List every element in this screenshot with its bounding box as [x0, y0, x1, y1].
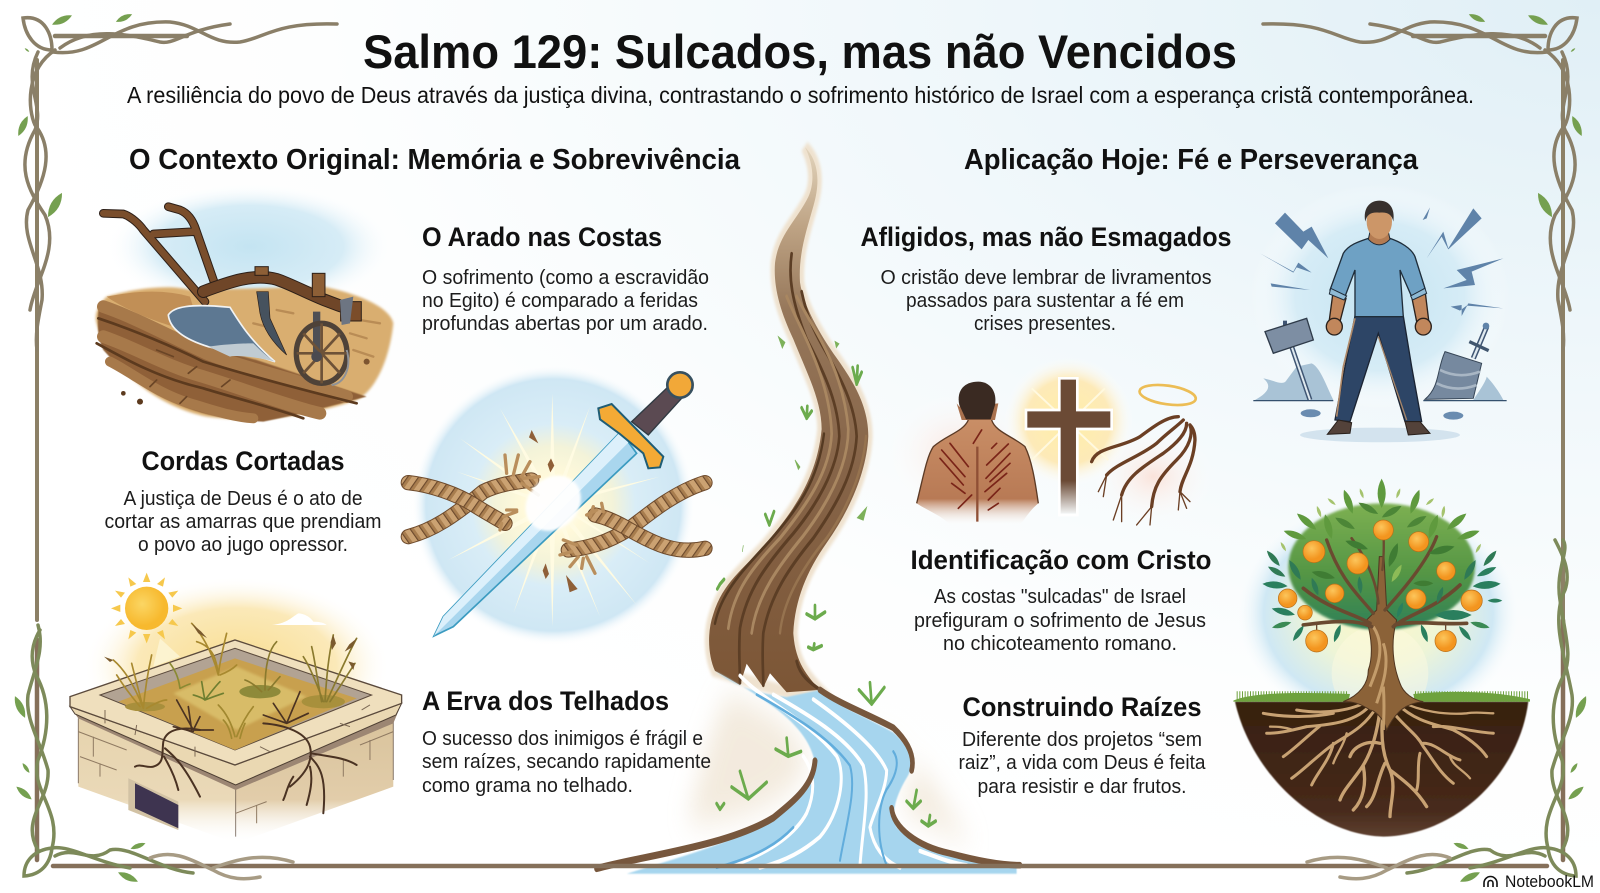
river	[627, 671, 1017, 874]
icon: scarred back, cross and whip	[883, 357, 1217, 527]
heading: left column: O Contexto Original: Memória e Sobrevivência	[129, 144, 741, 176]
text block: Cordas Cortadas: o povo ao jugo opressor.	[138, 533, 348, 556]
text block: A Erva dos Telhados: A Erva dos Telhados	[422, 686, 669, 716]
river banks	[820, 690, 1020, 865]
watermark: NotebookLM: NotebookLM	[1505, 873, 1594, 891]
icon: plow in the field	[96, 183, 393, 422]
text block: A Erva dos Telhados: sem raízes, secando rapidamente	[422, 750, 711, 773]
text block: O Arado nas Costas	[422, 222, 709, 335]
text block: Afligidos, mas não Esmagados	[860, 222, 1232, 335]
icon: sword cutting ropes	[408, 365, 705, 645]
text block: A Erva dos Telhados: como grama no telhado.	[422, 774, 633, 797]
text block: Cordas Cortadas: A justiça de Deus é o ato de	[124, 487, 362, 510]
text block: Afligidos, mas não Esmagados: Afligidos, mas não Esmagados	[860, 222, 1232, 252]
text block: O Arado nas Costas: O Arado nas Costas	[422, 222, 662, 252]
title: Salmo 129: Sulcados, mas não Vencidos	[363, 25, 1237, 78]
rope: right strands	[568, 483, 705, 550]
text block: Identificação com Cristo: no chicoteamento romano.	[943, 632, 1177, 655]
text block: Cordas Cortadas: cortar as amarras que prendiam	[104, 510, 382, 533]
sun	[111, 573, 182, 643]
icon: fruit tree with deep roots	[1233, 479, 1530, 837]
text block: Construindo Raízes: para resistir e dar frutos.	[978, 775, 1186, 798]
text block: Construindo Raízes: Construindo Raízes	[962, 692, 1202, 722]
text block: Identificação com Cristo: As costas "sulcadas" de Israel	[934, 585, 1186, 608]
building walls	[78, 718, 236, 843]
text block: Afligidos, mas não Esmagados: passados para sustentar a fé em	[906, 289, 1184, 312]
text block: A Erva dos Telhados	[422, 686, 711, 797]
text block: Cordas Cortadas	[104, 446, 382, 556]
text block: Identificação com Cristo: prefiguram o sofrimento de Jesus	[914, 609, 1206, 632]
central path of furrowed earth	[597, 147, 1020, 874]
text block: Cordas Cortadas: Cordas Cortadas	[142, 446, 344, 476]
text block: Identificação com Cristo	[910, 545, 1212, 655]
vine: bottom-left corner	[24, 625, 293, 879]
text block: A Erva dos Telhados: O sucesso dos inimigos é frágil e	[422, 727, 703, 750]
vine: top-right corner	[1263, 18, 1577, 350]
vine: bottom-right corner	[1307, 540, 1576, 879]
text block: O Arado nas Costas: O sofrimento (como a escravidão	[422, 266, 709, 289]
heading: right column: Aplicação Hoje: Fé e Perseverança	[964, 144, 1419, 176]
text block: Construindo Raízes	[958, 692, 1206, 798]
text block: Construindo Raízes: raiz”, a vida com Deus é feita	[958, 751, 1206, 774]
leaves	[1262, 479, 1502, 643]
subtitle: A resiliência do povo de Deus através da justiça divina, contrastando o sofrimento histórico de Israel com a esperança cristã contemporânea.	[127, 82, 1474, 108]
text block: Afligidos, mas não Esmagados: crises presentes.	[974, 312, 1116, 335]
text block: Construindo Raízes: Diferente dos projetos “sem	[962, 728, 1202, 751]
text block: O Arado nas Costas: profundas abertas por um arado.	[422, 312, 708, 335]
icon: grass on the rooftop	[70, 573, 402, 847]
fruits	[1278, 520, 1482, 652]
vine: top-left corner	[23, 18, 337, 350]
rope: left strands	[408, 480, 532, 537]
grass tufts on the path	[717, 366, 936, 826]
text block: O Arado nas Costas: no Egito) é comparado a feridas	[422, 289, 698, 312]
text block: Identificação com Cristo: Identificação com Cristo	[910, 545, 1212, 575]
icon: standing man with broken weapons	[1250, 183, 1510, 442]
text block: Afligidos, mas não Esmagados: O cristão deve lembrar de livramentos	[880, 266, 1212, 289]
